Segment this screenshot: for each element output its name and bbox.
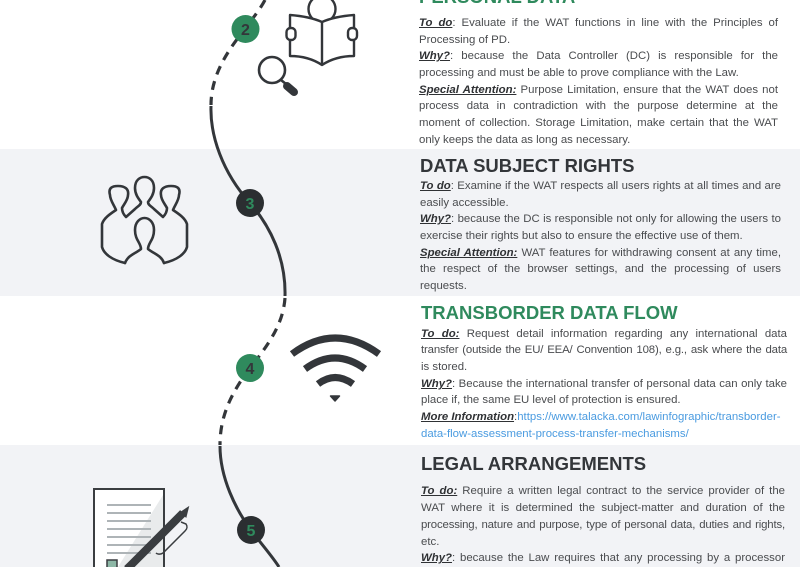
text block: legal arrangements: To do: Require a written legal contract to the service provider of the [421, 485, 785, 497]
text block: data subject rights: To do: Examine if the WAT respects all users rights at all times and are [420, 180, 781, 192]
text block: legal arrangements [421, 485, 785, 564]
text block: data subject rights: exercise their rights but also to ensure the effective use of them. [420, 230, 743, 242]
icon: person reading book [286, 0, 357, 65]
text block: legal arrangements: etc. [421, 536, 439, 548]
text block: data subject rights: requests. [420, 280, 467, 292]
marker 2 [232, 15, 260, 43]
text block: transborder data flow: is stored. [421, 361, 467, 373]
heading: legal arrangements: LEGAL ARRANGEMENTS [421, 453, 646, 474]
text block: data subject rights: Why?: because the DC is responsible not only for allowing the users to [420, 213, 781, 225]
solid path: step 5 [220, 446, 279, 567]
marker 3: 3 [246, 196, 255, 213]
text block: personal data: Special Attention: Purpose Limitation, ensure that the WAT does not [419, 84, 778, 96]
text block: personal data: Processing of PD. [419, 34, 510, 46]
text block: personal data: process data in contradiction with the purpose determine at the [419, 100, 778, 112]
icon: group of people [102, 177, 187, 263]
band: legal arrangements background [0, 445, 800, 567]
solid path: step 2 to 3 and on [211, 106, 285, 296]
icon: contract document and pen [94, 489, 188, 567]
marker 4 [236, 354, 264, 382]
marker 5 [237, 516, 265, 544]
text block: personal data [419, 17, 778, 146]
text block: transborder data flow: transfer (outside the EU/ EEA/ Convention 108), e.g., ask where the data [421, 344, 787, 356]
text block: data subject rights: the respect of the browser settings, and the processing of users [420, 263, 781, 275]
band: data subject rights background [0, 149, 800, 296]
text block: transborder data flow [421, 328, 788, 440]
text block: personal data: To do: Evaluate if the WAT functions in line with the Principles of [419, 17, 778, 29]
text block: transborder data flow: To do: Request detail information regarding any international data [421, 328, 787, 340]
dashed path: step 2 [211, 0, 265, 105]
marker 3 [236, 189, 264, 217]
text block: legal arrangements: WAT where it is determined the subject-matter and duration of the [421, 502, 785, 514]
text block: legal arrangements: Why?: because the Law requires that any processing by a processor [421, 552, 785, 564]
text block: transborder data flow: Why?: Because the international transfer of personal data can only take [421, 378, 787, 390]
text block: transborder data flow: data-flow-assessment-process-transfer-mechanisms/ [421, 428, 689, 440]
text block: personal data: Why?: because the Data Controller (DC) is responsible for the [419, 50, 778, 62]
text block: legal arrangements: processing, nature and purpose, type of personal data, duties and rights, [421, 519, 785, 531]
marker 4: 4 [246, 361, 255, 378]
text block: personal data: only keeps the data as long as necessary. [419, 134, 630, 146]
icon: wifi signal [292, 338, 379, 401]
marker 2: 2 [241, 22, 250, 39]
text block: transborder data flow: place if, the same EU level of protection is ensured. [421, 394, 681, 406]
icon: magnifying glass [259, 57, 294, 92]
text block: personal data: moment of collection. Storage Limitation, make certain that the WAT [419, 117, 778, 129]
dashed path: step 4 [220, 298, 285, 445]
text block: data subject rights [420, 180, 781, 292]
text block: transborder data flow: More Information:https://www.talacka.com/lawinfographic/transborder- [421, 411, 781, 423]
marker 5: 5 [247, 523, 256, 540]
text block: data subject rights: easily accessible. [420, 197, 509, 209]
text block: data subject rights: Special Attention: WAT features for withdrawing consent at any time, [420, 247, 781, 259]
text block: personal data: processing and must be able to prove compliance with the Law. [419, 67, 739, 79]
heading: data subject rights: DATA SUBJECT RIGHTS [420, 155, 634, 176]
heading: transborder data flow: TRANSBORDER DATA FLOW [421, 302, 678, 323]
